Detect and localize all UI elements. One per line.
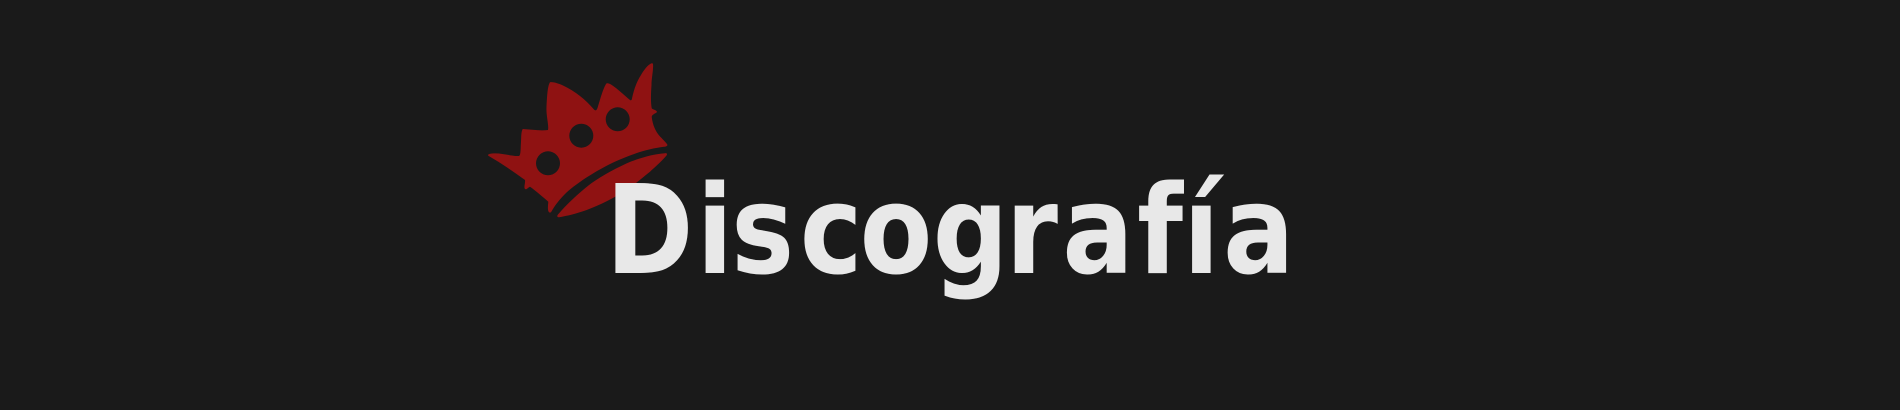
icon: tilted red crown [488,63,667,217]
crown brim [557,153,667,217]
title: Discografía [606,159,1294,303]
crown body with three holes [488,63,667,213]
